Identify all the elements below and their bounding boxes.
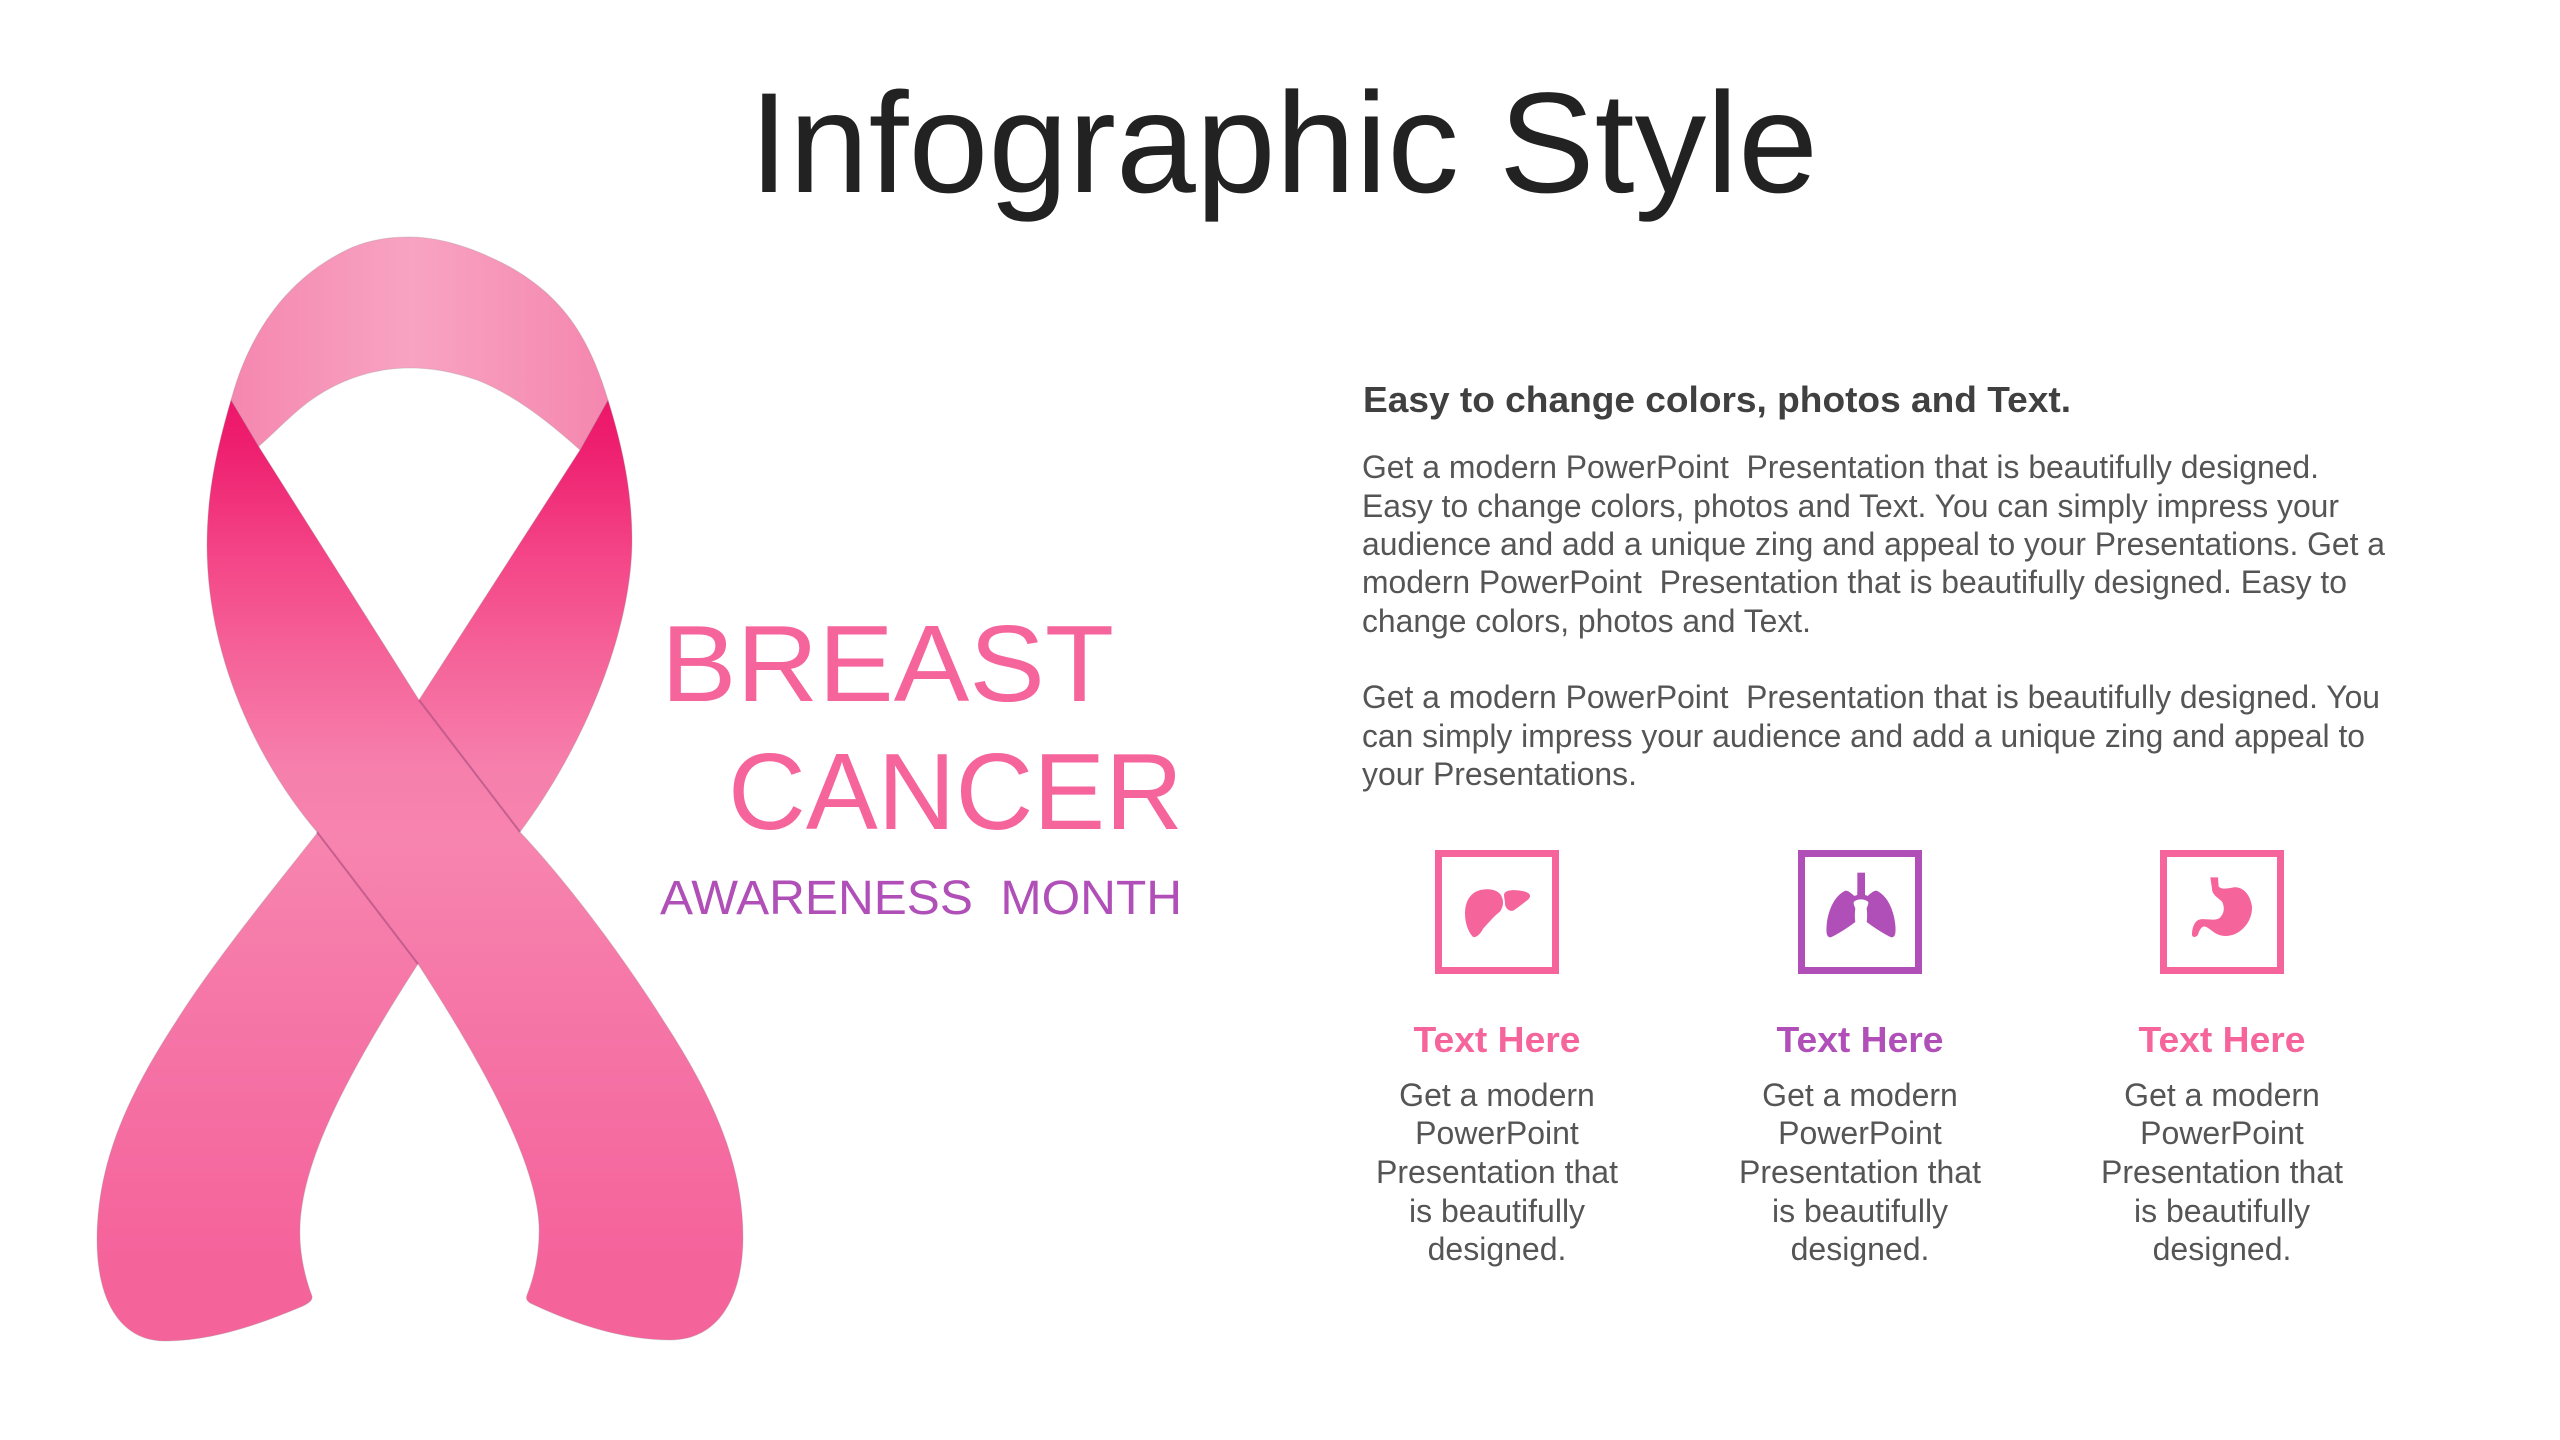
paragraph 2: your Presentations. <box>1362 756 1637 792</box>
text: AWARENESS MONTH: AWARENESS MONTH <box>660 872 1182 925</box>
description: Get a modern <box>1399 1077 1595 1113</box>
label: Text Here: Text Here <box>1776 1019 1944 1060</box>
description: designed. <box>2153 1231 2291 1267</box>
paragraph 2 <box>1362 679 2380 792</box>
label: Text Here: Text Here <box>2138 1019 2306 1060</box>
paragraph 2: Get a modern PowerPoint Presentation that is beautifully designed. You <box>1362 679 2380 715</box>
description: Presentation that <box>1739 1154 1981 1190</box>
panel: liver column <box>1376 854 1618 1267</box>
icon: lungs <box>1802 854 1918 970</box>
ribbon top loop <box>231 237 608 450</box>
description <box>2101 1077 2343 1267</box>
description: Get a modern <box>2124 1077 2320 1113</box>
description <box>1739 1077 1981 1267</box>
paragraph 1 <box>1362 449 2385 639</box>
breast cancer wordmark <box>660 603 1183 925</box>
title: Infographic Style <box>749 64 1818 223</box>
description: Presentation that <box>1376 1154 1618 1190</box>
text: CANCER: CANCER <box>728 731 1183 853</box>
description: PowerPoint <box>1778 1115 1942 1151</box>
ribbon front band <box>207 400 743 1340</box>
panel: stomach column <box>2101 854 2343 1267</box>
text: BREAST: BREAST <box>661 603 1114 725</box>
ribbon back band upper <box>419 400 632 832</box>
icon: stomach <box>2164 854 2280 970</box>
paragraph 1: audience and add a unique zing and appeal to your Presentations. Get a <box>1362 526 2385 562</box>
description: designed. <box>1791 1231 1929 1267</box>
description: designed. <box>1428 1231 1566 1267</box>
description: PowerPoint <box>2140 1115 2304 1151</box>
ribbon back band lower <box>97 832 418 1341</box>
description: is beautifully <box>2134 1193 2310 1229</box>
description <box>1376 1077 1618 1267</box>
description: is beautifully <box>1409 1193 1585 1229</box>
icon: liver <box>1438 854 1556 970</box>
panel: lungs column <box>1739 854 1981 1267</box>
paragraph 1: modern PowerPoint Presentation that is beautifully designed. Easy to <box>1362 564 2347 600</box>
heading: Easy to change colors, photos and Text. <box>1363 379 2071 420</box>
description: is beautifully <box>1772 1193 1948 1229</box>
description: Get a modern <box>1762 1077 1958 1113</box>
paragraph 1: change colors, photos and Text. <box>1362 603 1811 639</box>
paragraph 1: Easy to change colors, photos and Text. You can simply impress your <box>1362 488 2339 524</box>
icon: pink awareness ribbon <box>97 237 743 1341</box>
paragraph 1: Get a modern PowerPoint Presentation that is beautifully designed. <box>1362 449 2319 485</box>
label: Text Here: Text Here <box>1414 1019 1580 1060</box>
description: Presentation that <box>2101 1154 2343 1190</box>
description: PowerPoint <box>1415 1115 1579 1151</box>
paragraph 2: can simply impress your audience and add a unique zing and appeal to <box>1362 718 2365 754</box>
